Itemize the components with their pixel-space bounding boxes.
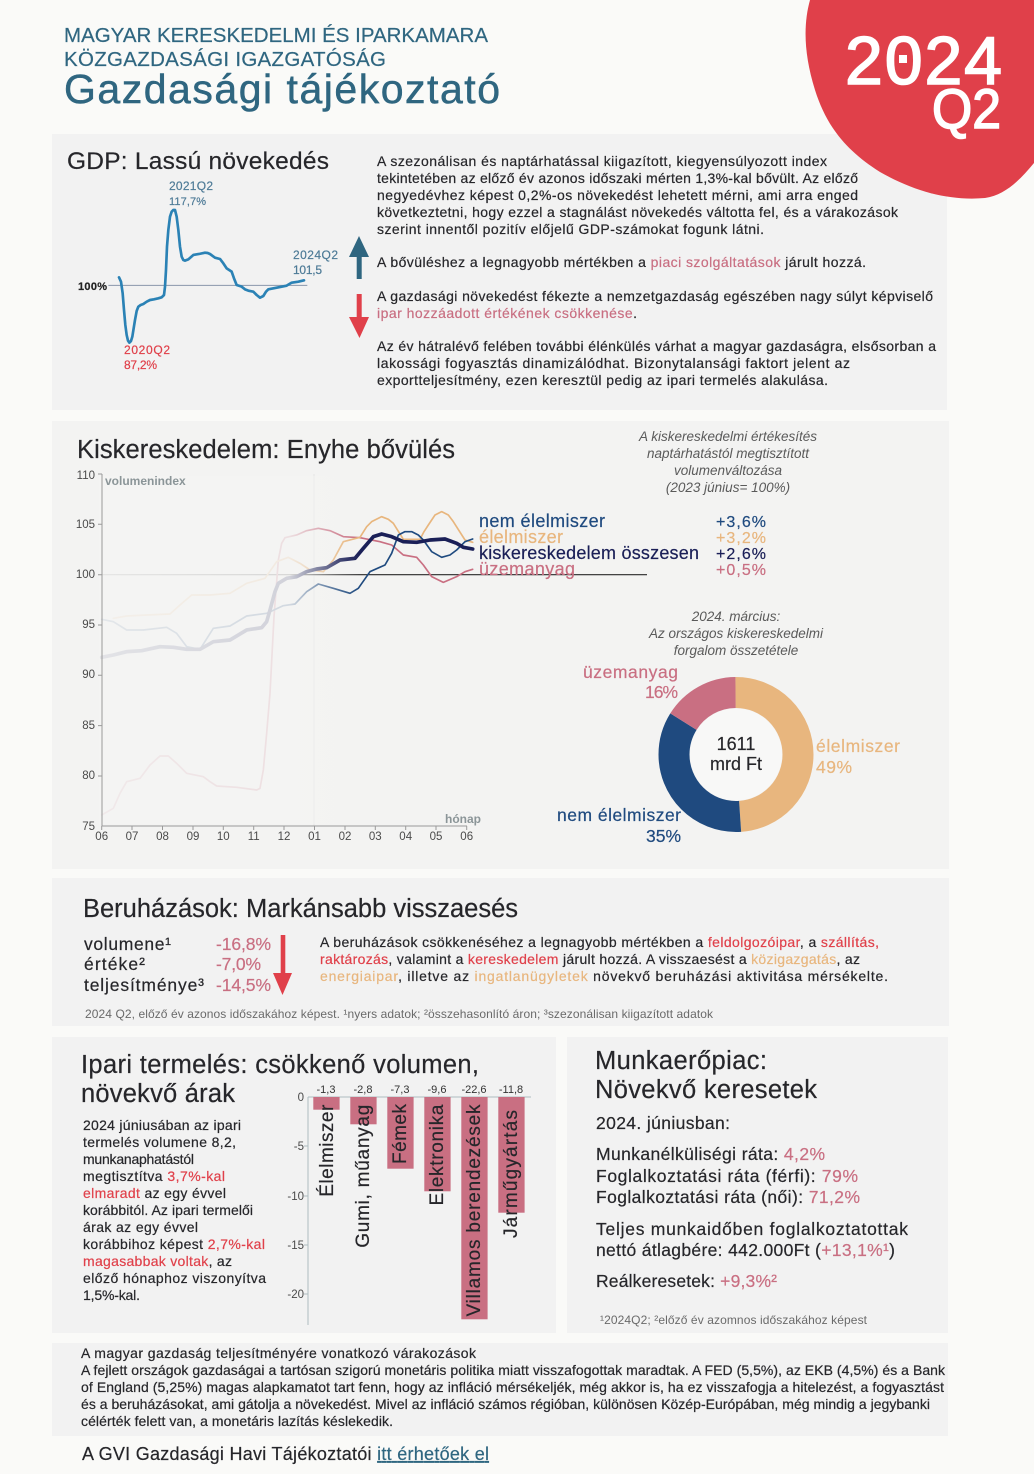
heading: investments: Beruházások: Markánsabb visszaesés [83,895,518,923]
line chart: retail volume index: 04 [399,831,413,843]
bar chart: industrial output by sector: -5 [294,1141,304,1153]
panel: expectations: A fejlett országok gazdaságai a tartósan szigorú monetáris politika miatt visszafogottak maradtak. A FED (5,5%), az EKB (4,5%) és a Bank [81,1362,946,1378]
legend: series names and changes: nem élelmiszer [479,511,605,531]
text: industrial description: megtisztítva 3,7%-kal [83,1168,225,1184]
header: organisation and title: KÖZGAZDASÁGI IGAZGATÓSÁG [64,48,386,71]
bar chart: industrial output by sector: -2,8 [354,1084,372,1096]
text: GDP description: szerint innentől pozitív előjelű GDP-számokat fogunk látni. [377,221,764,237]
line chart: retail volume index: volumenindex [105,474,186,488]
text: industrial description: 2024 júniusában az ipari [83,1117,241,1133]
bar chart: industrial output by sector: -15 [287,1240,304,1252]
text: GDP description [377,153,936,388]
panel: expectations: és a beruházásokat, ami gátolja a növekedést. Mivel az infláció számos régióban, különösen Közép-Európában, még mindig a jegybanki [81,1396,930,1412]
panel: expectations: A magyar gazdaság teljesítményére vonatkozó várakozások [81,1345,477,1361]
text: industrial description: árak az egy évvel [83,1219,198,1235]
text: investment description: A beruházások csökkenéséhez a legnagyobb mértékben a feldolgozóipar, a szállítás, [320,934,879,950]
text: GDP description: tekintetében az előző év azonos időszaki mérten 1,3%-kal bővült. Az előző [377,170,858,186]
footnote: labour: ¹2024Q2; ²előző év azomnos időszakához képest [600,1313,868,1327]
bar chart: industrial output by sector: -9,6 [428,1084,446,1096]
donut chart: retail composition: 16% [645,682,678,702]
text: industrial description: korábbitól. Az ipari termelői [83,1202,253,1218]
chart: GDP line: 101,5 [293,263,322,277]
panel: labour market [567,1037,948,1333]
metrics: investment figures: -7,0% [216,954,261,974]
line chart: retail volume index: 01 [308,831,321,843]
text: industrial description: 1,5%-kal. [83,1287,140,1303]
bar chart: industrial output by sector: -1,3 [317,1084,335,1096]
panel: expectations: of England (5,25%) magas alapkamatot tart fenn, hogy az infláció mérsékeljék, még akkor is, ha ez visszafogja a hitelezést, a fogyasztást [81,1379,944,1395]
chart title: volumenváltozása [674,463,783,478]
text: industrial description: korábbihoz képest 2,7%-kal [83,1236,265,1252]
panel: industrial production [52,1037,556,1333]
panel: expectations [52,1343,948,1436]
heading: industrial production: növekvő árak [81,1080,235,1108]
metrics: investment figures: -14,5% [216,975,271,995]
badge: 2024 Q2: Q2 [932,77,1001,140]
donut title: 2024. március: [691,609,781,624]
line chart: retail volume index: 03 [369,831,382,843]
text: industrial description [83,1117,266,1303]
text: industrial description: elmaradt az egy évvel [83,1185,226,1201]
bar chart: industrial output by sector: -11,8 [499,1084,523,1096]
heading: labour market: Növekvő keresetek [595,1076,817,1104]
text: GDP description: exportteljesítmény, ezen keresztül pedig az ipari termelés alakulása. [377,372,828,388]
donut chart: retail composition: élelmiszer [816,736,900,756]
donut chart: retail composition [557,662,900,846]
line chart: retail volume index: 12 [278,831,290,843]
chart: GDP line: 117,7% [169,196,206,208]
text: GDP description: következtetni, hogy ezzel a stagnálást növekedés váltotta fel, és a várakozások [377,204,899,220]
donut chart: retail composition: 1611 [717,734,755,754]
line chart: retail volume index: 11 [248,831,260,843]
line chart: retail volume index: hónap [445,812,481,826]
legend: series names and changes: +2,6% [716,546,766,563]
donut title [648,609,824,658]
donut chart: retail composition: mrd Ft [710,754,762,774]
panel: GDP [52,134,947,410]
bar chart: industrial output by sector: Járműgyártás [501,1110,522,1238]
donut title: forgalom összetétele [674,643,798,658]
line chart: retail volume index: 75 [82,821,95,833]
text: labour figures: Munkanélküliségi ráta: 4,2% [596,1144,825,1164]
text: labour figures: nettó átlagbére: 442.000Ft (+13,1%¹) [596,1240,895,1260]
chart: GDP line: 2021Q2 [169,179,213,193]
line chart: retail volume index: 105 [76,519,95,531]
text: GDP description: ipar hozzáadott értékének csökkenése. [377,305,637,321]
legend: series names and changes: +0,5% [716,562,766,579]
header: organisation and title: Gazdasági tájékoztató [64,66,500,112]
text: industrial description: munkanaphatástól [83,1151,194,1167]
chart title: A kiskereskedelmi értékesítés [638,429,817,444]
chart: GDP line: 100% [78,281,107,293]
text: labour figures [596,1113,908,1291]
text: labour figures: 2024. júniusban: [596,1113,730,1133]
heading: industrial production [81,1051,479,1108]
line chart: retail volume index: 05 [430,831,442,843]
legend: series names and changes: +3,6% [716,514,766,531]
line chart: retail volume index: 06 [460,831,473,843]
line chart: retail volume index [76,470,647,843]
bar chart: industrial output by sector: Gumi, műanyag [353,1105,374,1248]
line chart: retail volume index: 100 [76,569,95,581]
bar chart: industrial output by sector: -10 [287,1191,304,1203]
metrics: investment figures: volumene¹ [84,934,171,954]
header: organisation and title [64,24,500,112]
legend: series names and changes: +3,2% [716,530,766,547]
bar chart: industrial output by sector: 0 [298,1092,304,1104]
footnote: investments: 2024 Q2, előző év azonos időszakához képest. ¹nyers adatok; ²összehasonlító áron; ³szezonálisan kiigazított adatok [85,1007,714,1021]
bar chart: industrial output by sector: Villamos berendezések [464,1104,485,1316]
chart: GDP line: 2020Q2 [124,343,170,357]
legend: series names and changes [479,511,766,579]
metrics: investment figures: értéke² [84,954,145,974]
donut chart: retail composition: üzemanyag [583,662,678,682]
text: investment description [320,934,888,984]
bar chart: industrial output by sector: -7,3 [391,1084,409,1096]
text: GDP description: A gazdasági növekedést fékezte a nemzetgazdaság egészében nagy súlyt képviselő [377,288,933,304]
text: labour figures: Teljes munkaidőben foglalkoztatottak [596,1219,908,1239]
line chart: retail volume index: 80 [82,770,95,782]
header: organisation and title: MAGYAR KERESKEDELMI ÉS IPARKAMARA [64,24,488,47]
text: GDP description: Az év hátralévő felében további élénkülés várhat a magyar gazdaságra, elsősorban a [377,338,936,354]
badge: 2024 Q2: 2024 [845,23,1002,99]
metrics: investment figures [84,934,271,995]
legend: series names and changes: élelmiszer [479,527,563,547]
heading: industrial production: Ipari termelés: csökkenő volumen, [81,1051,479,1079]
heading: labour market [595,1047,817,1104]
arrow: up [349,236,369,279]
footer link line: A GVI Gazdasági Havi Tájékoztatói itt érhetőek el [82,1444,489,1464]
donut chart: retail composition: 35% [646,826,681,846]
bar chart: industrial output by sector: Elektronika [427,1104,448,1206]
panel: retail [52,421,949,869]
line chart: retail volume index: 85 [82,720,95,732]
line chart: retail volume index: 110 [77,470,95,482]
metrics: investment figures: teljesítménye³ [84,975,204,995]
heading: GDP: GDP: Lassú növekedés [67,148,329,175]
text: labour figures: Reálkeresetek: +9,3%² [596,1271,777,1291]
donut chart: retail composition: 49% [816,757,852,777]
arrow: decline [273,935,292,995]
text: labour figures: Foglalkoztatási ráta (női): 71,2% [596,1187,860,1207]
text: industrial description: magasabbak voltak, az [83,1253,232,1269]
text: GDP description: A bővüléshez a legnagyobb mértékben a piaci szolgáltatások járult hozzá. [377,254,866,270]
arrow: down [349,294,369,338]
text: labour figures: Foglalkoztatási ráta (férfi): 79% [596,1166,858,1186]
line chart: retail volume index: 08 [156,831,169,843]
panel: investments [52,878,949,1026]
badge: 2024 Q2 [806,0,1034,199]
chart title [638,429,817,495]
bar chart: industrial output by sector: Élelmiszer [317,1104,338,1197]
chart title: (2023 június= 100%) [666,480,790,495]
chart: GDP line: 87,2% [124,358,157,372]
line chart: retail volume index: 09 [187,831,199,843]
donut chart: retail composition: nem élelmiszer [557,805,681,825]
line chart: retail volume index: 10 [217,831,230,843]
bar chart: industrial output by sector: -20 [287,1289,304,1301]
line chart: retail volume index: 95 [82,619,95,631]
line chart: retail volume index: 02 [339,831,351,843]
chart: GDP line [78,179,338,372]
text: GDP description: A szezonálisan és naptárhatással kiigazított, kiegyensúlyozott index [377,153,827,169]
legend: series names and changes: kiskereskedelem összesen [479,543,699,563]
heading: retail: Kiskereskedelem: Enyhe bővülés [77,436,455,464]
text: investment description: raktározás, valamint a kereskedelem járult hozzá. A visszaesést a közigazgatás, az [320,951,860,967]
text: GDP description: lakossági fogyasztás dinamizálódhat. Bizonytalansági faktort jelent az [377,355,850,371]
text: GDP description: negyedévhez képest 0,2%-os növekedést lehetett mérni, ami arra enged [377,187,858,203]
line chart: retail volume index: 07 [126,831,138,843]
panel: expectations: célérték felett van, a monetáris lazítás késlekedik. [81,1413,393,1429]
text: industrial description: termelés volumene 8,2, [83,1134,236,1150]
line chart: retail volume index: 90 [82,669,95,681]
chart title: naptárhatástól megtisztított [647,446,810,461]
text: investment description: energiaipar, illetve az ingatlanügyletek növekvő beruházási aktivitása mérsékelte. [320,968,888,984]
legend: series names and changes: üzemanyag [479,559,575,579]
donut title: Az országos kiskereskedelmi [648,626,824,641]
bar chart: industrial output by sector [287,1084,531,1325]
bar chart: industrial output by sector: Fémek [390,1104,411,1164]
text: industrial description: előző hónaphoz viszonyítva [83,1270,266,1286]
heading: labour market: Munkaerőpiac: [595,1047,767,1075]
bar chart: industrial output by sector: -22,6 [461,1084,487,1096]
chart: GDP line: 2024Q2 [293,248,338,262]
line chart: retail volume index: 06 [95,831,108,843]
metrics: investment figures: -16,8% [216,934,271,954]
